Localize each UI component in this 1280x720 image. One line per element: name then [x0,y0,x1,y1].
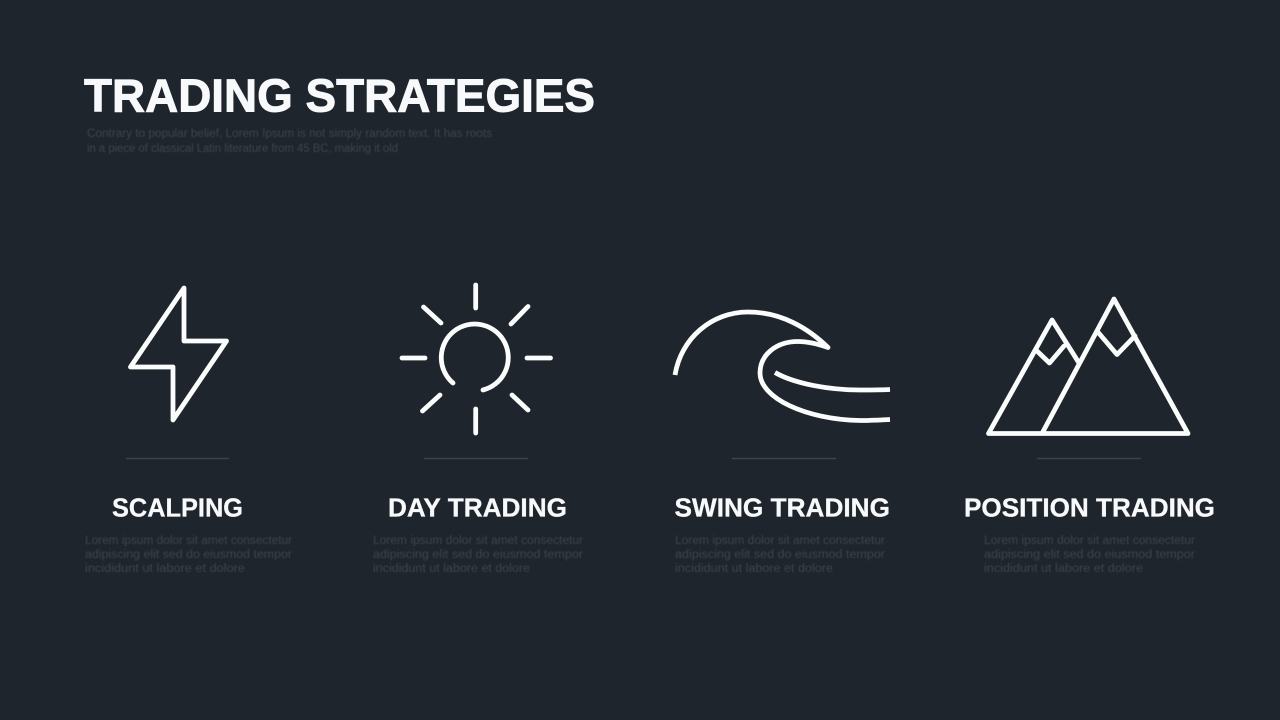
heading: position trading: POSITION TRADING [964,494,1215,522]
description: position trading: adipiscing elit sed do eiusmod tempor [984,549,1195,561]
intro text [87,128,492,155]
heading: day trading: DAY TRADING [388,494,567,522]
divider: scalping [126,458,229,460]
description: day trading: Lorem ipsum dolor sit amet consectetur [373,535,583,547]
description: swing trading [675,535,885,575]
description: swing trading: Lorem ipsum dolor sit amet consectetur [675,535,885,547]
description: swing trading: incididunt ut labore et dolore [675,563,833,575]
description: scalping [85,535,292,575]
icon: lightning bolt [130,288,226,420]
description: scalping: adipiscing elit sed do eiusmod tempor [85,549,292,561]
description: position trading: incididunt ut labore et dolore [984,563,1143,575]
panel: swing trading [674,312,890,575]
description: day trading: adipiscing elit sed do eiusmod tempor [373,549,583,561]
divider: swing trading [732,458,836,460]
description: position trading: Lorem ipsum dolor sit amet consectetur [984,535,1195,547]
heading: swing trading: SWING TRADING [674,494,890,522]
divider: day trading [424,458,528,460]
heading: scalping: SCALPING [112,494,243,522]
description: scalping: Lorem ipsum dolor sit amet consectetur [85,535,292,547]
divider: position trading [1037,458,1141,460]
description: swing trading: adipiscing elit sed do eiusmod tempor [675,549,885,561]
description: day trading [373,535,583,575]
panel: position trading [964,299,1215,575]
icon: sun [402,285,550,433]
panel: scalping [85,288,292,575]
title: TRADING STRATEGIES [84,70,595,122]
icon: mountains [988,299,1188,434]
description: day trading: incididunt ut labore et dolore [373,563,530,575]
panel: day trading [373,285,583,575]
icon: wave [675,312,890,421]
intro text: Contrary to popular belief, Lorem Ipsum is not simply random text. It has roots [87,128,492,140]
description: scalping: incididunt ut labore et dolore [85,563,245,575]
description: position trading [984,535,1195,575]
intro text: in a piece of classical Latin literature from 45 BC, making it old [87,143,398,155]
